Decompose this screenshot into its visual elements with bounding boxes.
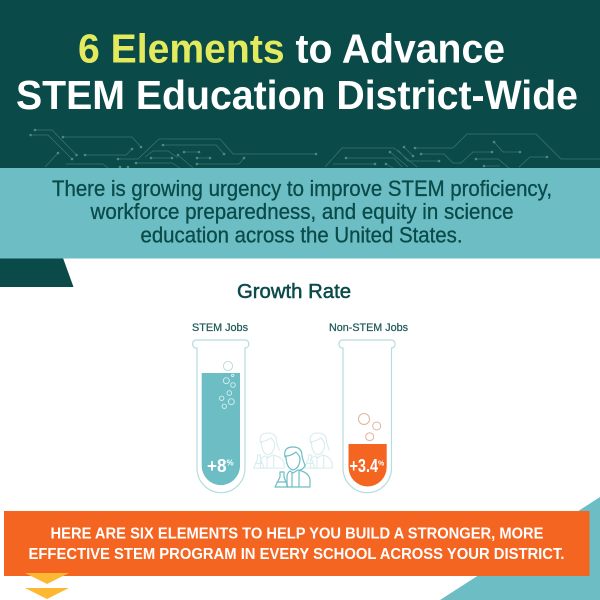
teal corner triangle	[440, 497, 600, 600]
label: STEM jobs: STEM Jobs	[192, 322, 248, 334]
label: Non-STEM jobs: Non-STEM Jobs	[329, 322, 408, 334]
arrow: down chevrons	[25, 573, 69, 599]
icon: centre scientist	[275, 447, 310, 487]
bubbles	[358, 414, 381, 441]
dark wedge	[0, 258, 74, 287]
liquid	[202, 373, 240, 485]
intro text: workforce preparedness, and equity in science	[90, 199, 513, 224]
callout text: HERE ARE SIX ELEMENTS TO HELP YOU BUILD A STRONGER, MORE	[50, 526, 544, 542]
title: 6 Elements to Advance	[78, 26, 505, 72]
title: STEM Education District-Wide	[16, 72, 578, 118]
tube outline	[193, 340, 249, 493]
value +3.4%: +3.4	[350, 456, 378, 476]
liquid	[348, 444, 387, 486]
intro text: There is growing urgency to improve STEM proficiency,	[52, 176, 552, 201]
icon: left scientist	[254, 433, 284, 468]
value +8%: %	[226, 458, 234, 468]
bubbles	[220, 361, 235, 408]
intro text	[52, 176, 552, 248]
tube outline	[339, 340, 395, 493]
title	[16, 26, 578, 118]
Non-STEM jobs test tube	[329, 322, 408, 493]
teal intro band	[0, 168, 600, 258]
callout text: EFFECTIVE STEM PROGRAM IN EVERY SCHOOL ACROSS YOUR DISTRICT.	[28, 546, 564, 563]
value +8%: +8	[207, 456, 226, 476]
intro text: education across the United States.	[140, 222, 462, 248]
callout text	[28, 526, 564, 563]
orange callout	[4, 511, 590, 576]
header panel	[0, 0, 600, 169]
circuit pattern	[29, 129, 600, 168]
chart heading: Growth Rate	[237, 281, 351, 303]
icon: right scientist	[305, 433, 332, 468]
icon: scientists	[254, 433, 332, 487]
value +3.4%: %	[378, 460, 385, 468]
STEM jobs test tube	[192, 322, 249, 493]
